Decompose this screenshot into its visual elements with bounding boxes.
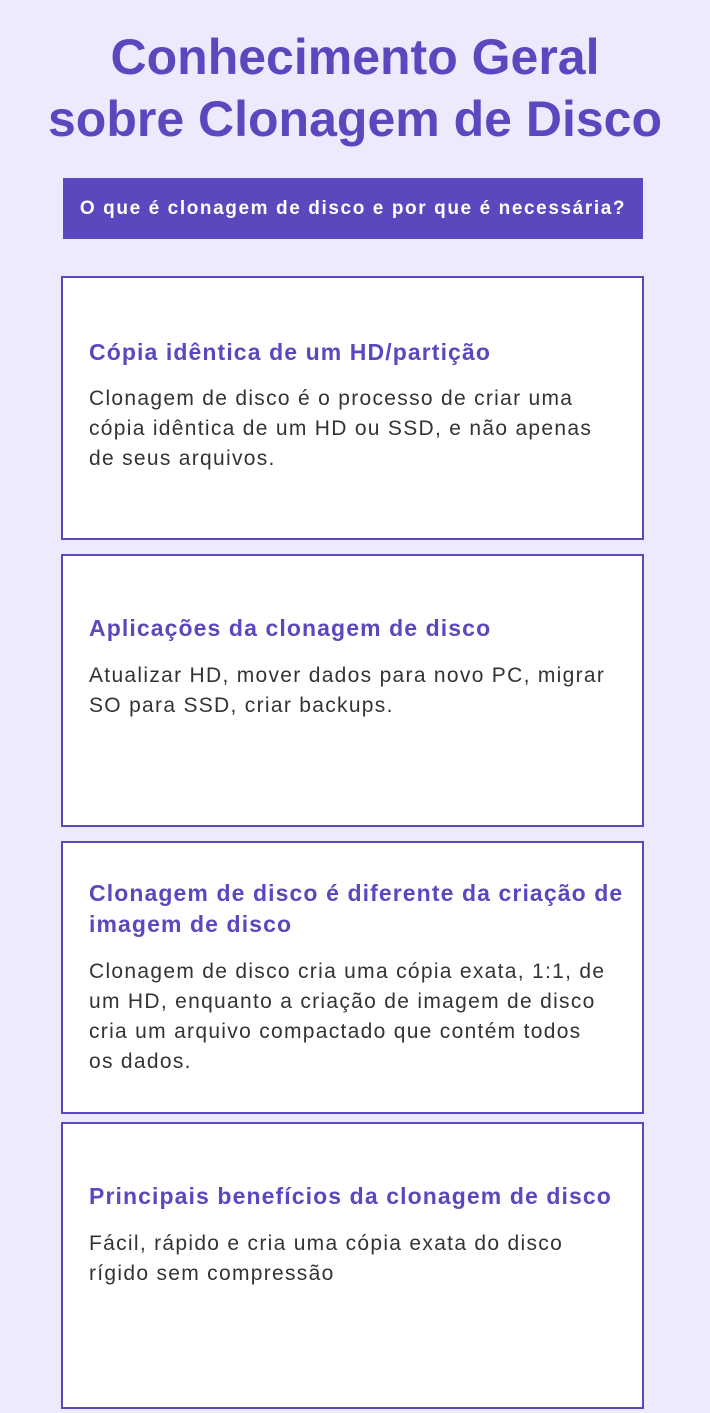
text block: cópia idêntica de um HD ou SSD, e não apenas [89, 417, 592, 440]
text block [89, 664, 605, 717]
text block: Clonagem de disco é o processo de criar uma [89, 387, 573, 410]
text block [89, 960, 605, 1073]
text block: SO para SSD, criar backups. [89, 694, 394, 717]
heading [89, 880, 623, 937]
title [48, 29, 662, 147]
text block: os dados. [89, 1050, 192, 1073]
panel: identical copy [61, 276, 644, 540]
heading: Cópia idêntica de um HD/partição [89, 339, 491, 365]
heading: Clonagem de disco é diferente da criação de [89, 880, 623, 906]
text block: Atualizar HD, mover dados para novo PC, migrar [89, 664, 605, 687]
text block: cria um arquivo compactado que contém todos [89, 1020, 581, 1043]
banner: question: O que é clonagem de disco e por que é necessária? [80, 198, 626, 219]
text block: Clonagem de disco cria uma cópia exata, 1:1, de [89, 960, 605, 983]
text block: de seus arquivos. [89, 447, 276, 470]
title: Conhecimento Geral [110, 29, 600, 85]
text block [89, 1232, 563, 1285]
text block [89, 387, 592, 470]
text block: Fácil, rápido e cria uma cópia exata do disco [89, 1232, 563, 1255]
text block: um HD, enquanto a criação de imagem de disco [89, 990, 596, 1013]
text block: rígido sem compressão [89, 1262, 335, 1285]
heading: Aplicações da clonagem de disco [89, 615, 491, 641]
banner: question [63, 178, 643, 239]
panel: applications [61, 554, 644, 827]
title: sobre Clonagem de Disco [48, 91, 662, 147]
heading: imagem de disco [89, 911, 292, 937]
panel: cloning vs imaging [61, 841, 644, 1114]
heading: Principais benefícios da clonagem de disco [89, 1183, 612, 1209]
panel: benefits [61, 1122, 644, 1409]
